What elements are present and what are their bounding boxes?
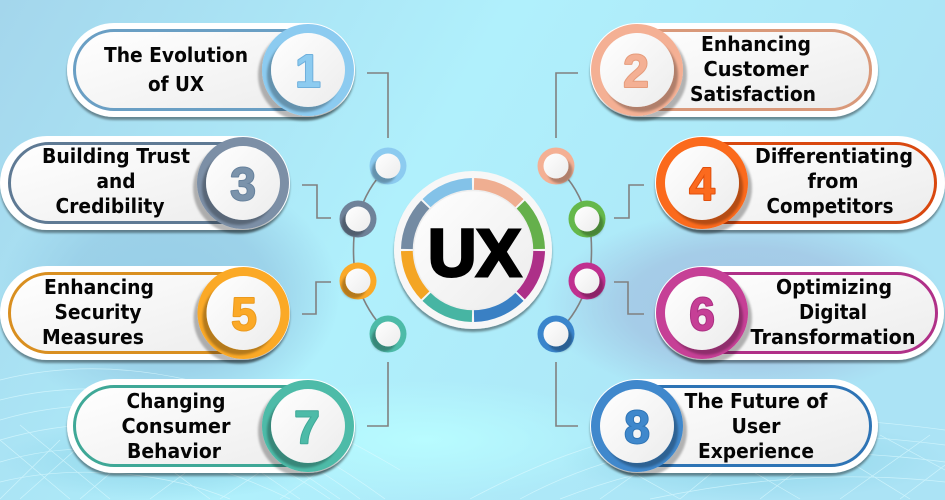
number 8: 8 [624,401,650,453]
label 4: from [808,169,858,193]
number 6 [656,267,748,359]
label 1: The Evolution [104,43,248,67]
label 6: Transformation [750,325,916,349]
node 6 [568,262,606,300]
node 8 [538,316,574,352]
label 1 [104,43,248,96]
node 4 [568,200,606,238]
label 3: Building Trust [42,144,190,168]
number 8 [591,380,683,472]
node 7 [370,316,406,352]
pill 4: Differentiating from Competitors [655,136,945,230]
number 6: 6 [689,288,715,340]
label 2: Satisfaction [690,82,816,106]
pill 6: Optimizing Digital Transformation [655,266,944,360]
label 4: Differentiating [755,144,913,168]
connector lines [302,73,644,426]
label 6: Digital [799,300,867,324]
label 7: Consumer [122,414,231,438]
label 3: and [96,169,136,193]
number 1: 1 [295,45,321,97]
label 8: User [732,414,781,438]
label 7 [122,389,231,463]
number 1 [262,24,354,116]
node 3 [340,200,376,238]
label 7: Behavior [127,439,221,463]
number 5: 5 [231,288,257,340]
label 2: Customer [704,57,809,81]
label 5 [42,275,154,349]
label 2 [690,32,816,106]
number 5 [198,267,290,359]
ring segments [408,184,538,316]
label 8: The Future of [684,389,828,413]
label 5: Enhancing [44,275,154,299]
node 2 [538,148,574,184]
label 3: Credibility [56,194,164,218]
label 3 [42,144,190,218]
number 4 [656,137,748,229]
label 2: Enhancing [701,32,811,56]
central UX hub [394,171,552,329]
number 2 [591,24,683,116]
pill 2: Enhancing Customer Satisfaction [590,23,878,117]
label 1: of UX [148,72,205,96]
label 6: Optimizing [776,275,892,299]
pill 7: Changing Consumer Behavior [67,379,355,473]
number 7 [262,380,354,472]
number 3 [197,137,289,229]
label 8 [684,389,828,463]
label 4 [755,144,913,218]
pill 1: The Evolution of UX [67,23,355,117]
node 1 [370,148,406,184]
pill 3: Building Trust and Credibility [0,136,290,230]
pill 5: Enhancing Security Measures [0,266,290,360]
number 4: 4 [689,158,715,210]
label 8: Experience [698,439,814,463]
pill 8: The Future of User Experience [590,379,878,473]
number 2: 2 [623,45,649,97]
label 5: Security [54,300,142,324]
number 7: 7 [294,401,320,453]
label 4: Competitors [766,194,894,218]
label 6 [750,275,916,349]
label 5: Measures [42,325,144,349]
node 5 [340,262,376,300]
label 7: Changing [126,389,226,413]
UX title: UX [428,216,521,291]
number 3: 3 [230,158,256,210]
